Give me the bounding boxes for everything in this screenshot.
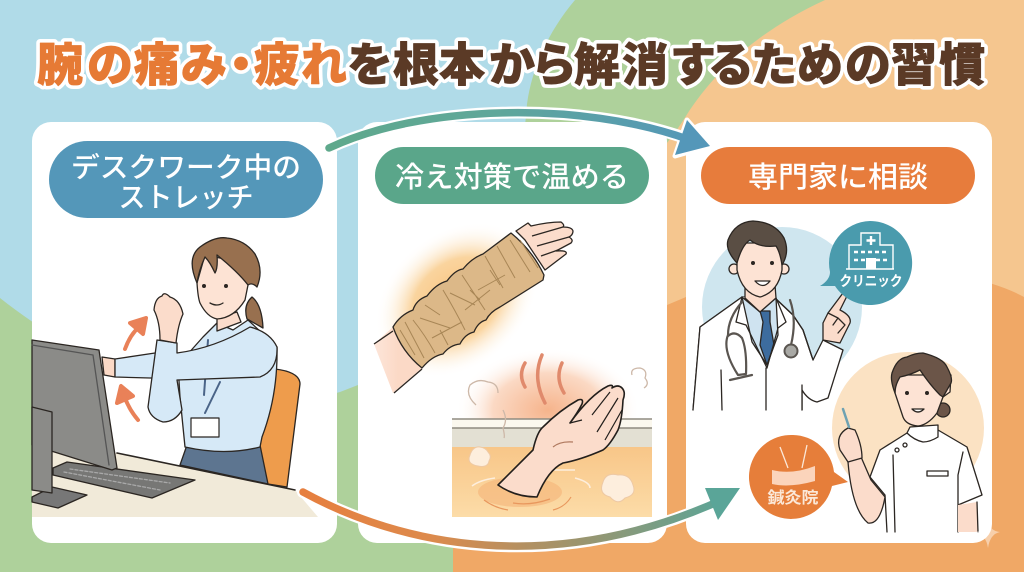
- sparkle mark: [974, 521, 1000, 548]
- id card: [191, 418, 219, 437]
- lanyard: [204, 340, 220, 413]
- upper sleeve arm: [958, 502, 978, 532]
- face: [197, 255, 248, 319]
- hand: [498, 385, 624, 497]
- motion arrows: [117, 318, 146, 420]
- coat: [693, 297, 843, 410]
- acupuncture speech bubble: [749, 435, 848, 519]
- illustration: acupuncturist: [832, 352, 984, 532]
- eyes and mouth: [751, 261, 755, 265]
- neck: [217, 312, 241, 331]
- crossed arm: [148, 327, 277, 422]
- hair: [192, 238, 260, 287]
- backdrop circle: [832, 352, 984, 504]
- extended sleeve: [115, 353, 178, 378]
- panel: desk stretching: [32, 122, 337, 543]
- hair: [891, 353, 952, 397]
- illustration: hand in warm bath: [452, 348, 652, 517]
- hand: [516, 222, 573, 270]
- warm glow: [344, 190, 570, 410]
- title: 腕の痛み・疲れを根本から解消するための習慣: [37, 39, 985, 91]
- heading pill: consult a specialist: 専門家に相談: [748, 161, 928, 194]
- chair: [260, 369, 300, 487]
- fist: [154, 294, 183, 343]
- bun: [936, 403, 950, 417]
- second monitor base: [32, 487, 87, 508]
- ears: [729, 264, 739, 274]
- steam clouds: [468, 368, 647, 438]
- extended hand: [102, 357, 115, 377]
- coat lapels: [736, 297, 786, 368]
- heading pill: desk stretching: デスクワーク中の: [71, 152, 301, 183]
- desk: [32, 450, 318, 517]
- eyes and mouth: [905, 391, 909, 395]
- illustration: doctor: [693, 221, 862, 410]
- ripples: [478, 477, 562, 507]
- arm: [848, 450, 885, 523]
- panel: consult a specialist: [686, 122, 992, 543]
- title: 腕の痛み・疲れ: [37, 39, 347, 91]
- panel: warming: [344, 122, 667, 543]
- heading pill: desk stretching: [49, 141, 323, 218]
- icon: hospital building: [846, 233, 894, 269]
- icon: needles on skin: [772, 445, 815, 485]
- heading pill: warming: 冷え対策で温める: [395, 161, 629, 194]
- keyboard: [53, 462, 195, 498]
- clinic label: クリニック: [840, 273, 902, 289]
- torso and shirt: [178, 320, 277, 452]
- glove: [393, 233, 544, 368]
- ponytail: [246, 297, 263, 328]
- uniform: [870, 430, 982, 532]
- knit texture: [400, 240, 538, 358]
- collar: [907, 425, 938, 442]
- forearm: [374, 327, 422, 393]
- hair: [727, 221, 787, 265]
- pointing hand: [823, 293, 850, 343]
- bath edge: [452, 419, 652, 447]
- heading pill: warming: [375, 147, 649, 204]
- title: を根本から解消するための習慣: [347, 39, 985, 91]
- backdrop circle: [702, 227, 862, 387]
- monitor: [32, 340, 117, 470]
- eyes and mouth: [202, 284, 206, 288]
- face: [737, 243, 782, 297]
- tie: [760, 311, 774, 365]
- water: [452, 447, 652, 517]
- illustration: woman stretching at desk: [32, 238, 318, 517]
- steam glow: [456, 348, 640, 472]
- trousers: [180, 445, 268, 484]
- shirt: [742, 297, 778, 365]
- heading pill: desk stretching: ストレッチ: [118, 182, 254, 213]
- heading pill: consult a specialist: [701, 147, 975, 204]
- clinic speech bubble: [820, 221, 912, 305]
- acupuncture label: 鍼灸院: [768, 488, 818, 507]
- stethoscope: [726, 300, 794, 380]
- hand with needle: [839, 428, 862, 462]
- foam right: [602, 474, 634, 502]
- arrow: bottom flow: [303, 488, 740, 546]
- face: [895, 375, 951, 426]
- foam left: [469, 447, 490, 466]
- illustration: knitted arm warmer: [344, 190, 573, 410]
- arrow: top flow: [329, 113, 710, 156]
- steam wisps: [522, 355, 564, 403]
- second monitor: [32, 407, 52, 493]
- pocket: [927, 471, 948, 476]
- neck: [745, 285, 776, 312]
